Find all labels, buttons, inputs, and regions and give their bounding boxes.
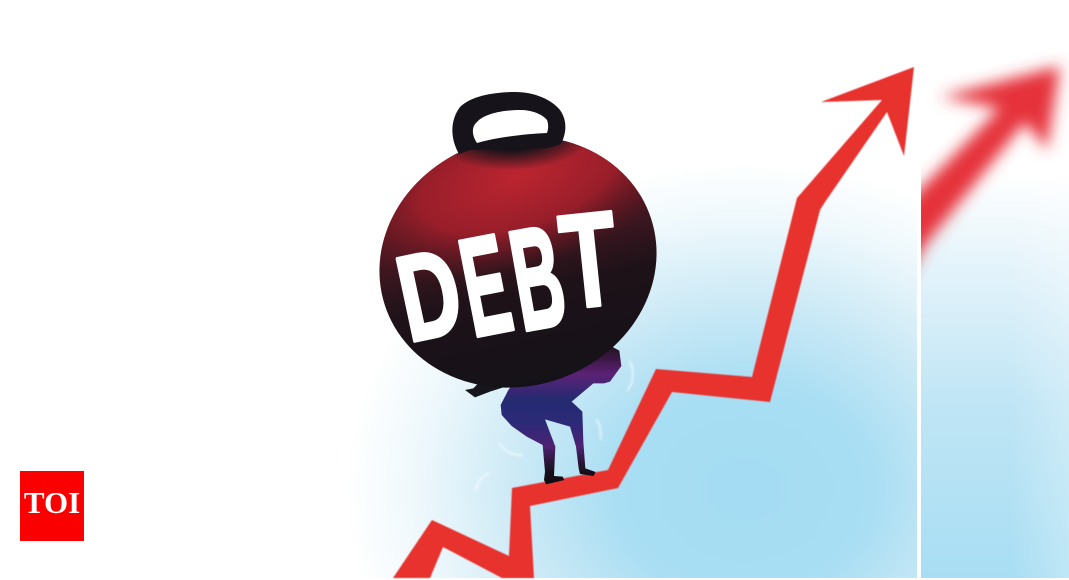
debt label: D	[386, 223, 473, 368]
TOI logo: TOI	[24, 485, 80, 520]
debt label: T	[553, 184, 625, 338]
debt label: E	[449, 206, 522, 367]
kettlebell handle	[452, 92, 565, 154]
blurred right panel	[921, 56, 1069, 578]
strain marks around the man	[476, 362, 633, 490]
TOI logo	[20, 471, 84, 541]
rising red arrow	[393, 67, 914, 578]
debt weight ball	[379, 140, 657, 388]
main panel sky glow	[379, 190, 917, 578]
debt label: B	[499, 194, 576, 361]
white panel divider	[917, 0, 921, 580]
man carrying the weight	[465, 346, 621, 484]
debt label	[386, 184, 625, 368]
